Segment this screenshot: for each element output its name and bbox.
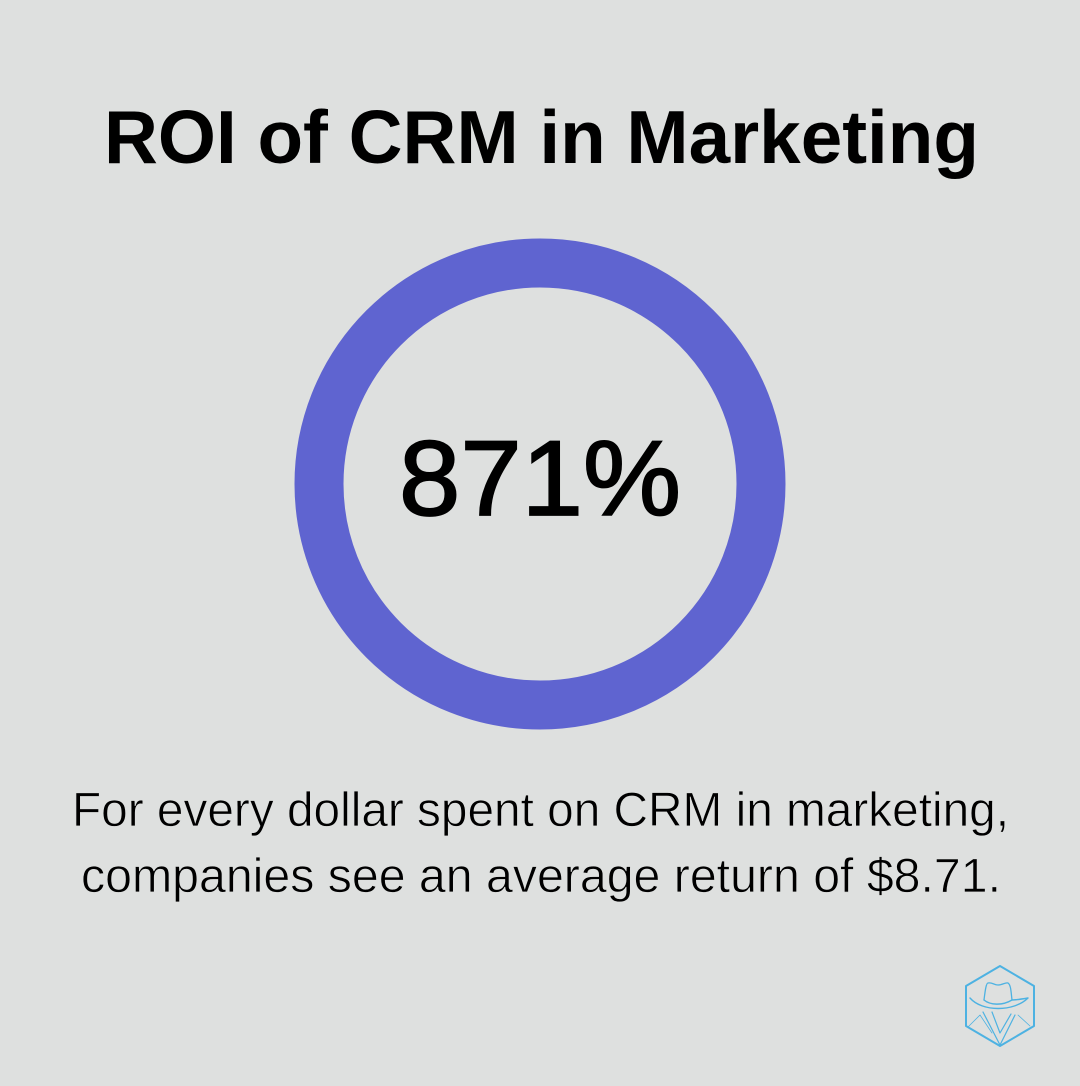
- description text: [72, 784, 1009, 903]
- description text: companies see an average return of $8.71.: [81, 850, 1001, 903]
- central value: 871%: [399, 418, 681, 538]
- icon: logo hexagon with hat and figure: [966, 966, 1034, 1046]
- description text: For every dollar spent on CRM in marketing,: [72, 784, 1009, 837]
- donut ring: [319, 263, 761, 705]
- title: ROI of CRM in Marketing: [104, 95, 979, 179]
